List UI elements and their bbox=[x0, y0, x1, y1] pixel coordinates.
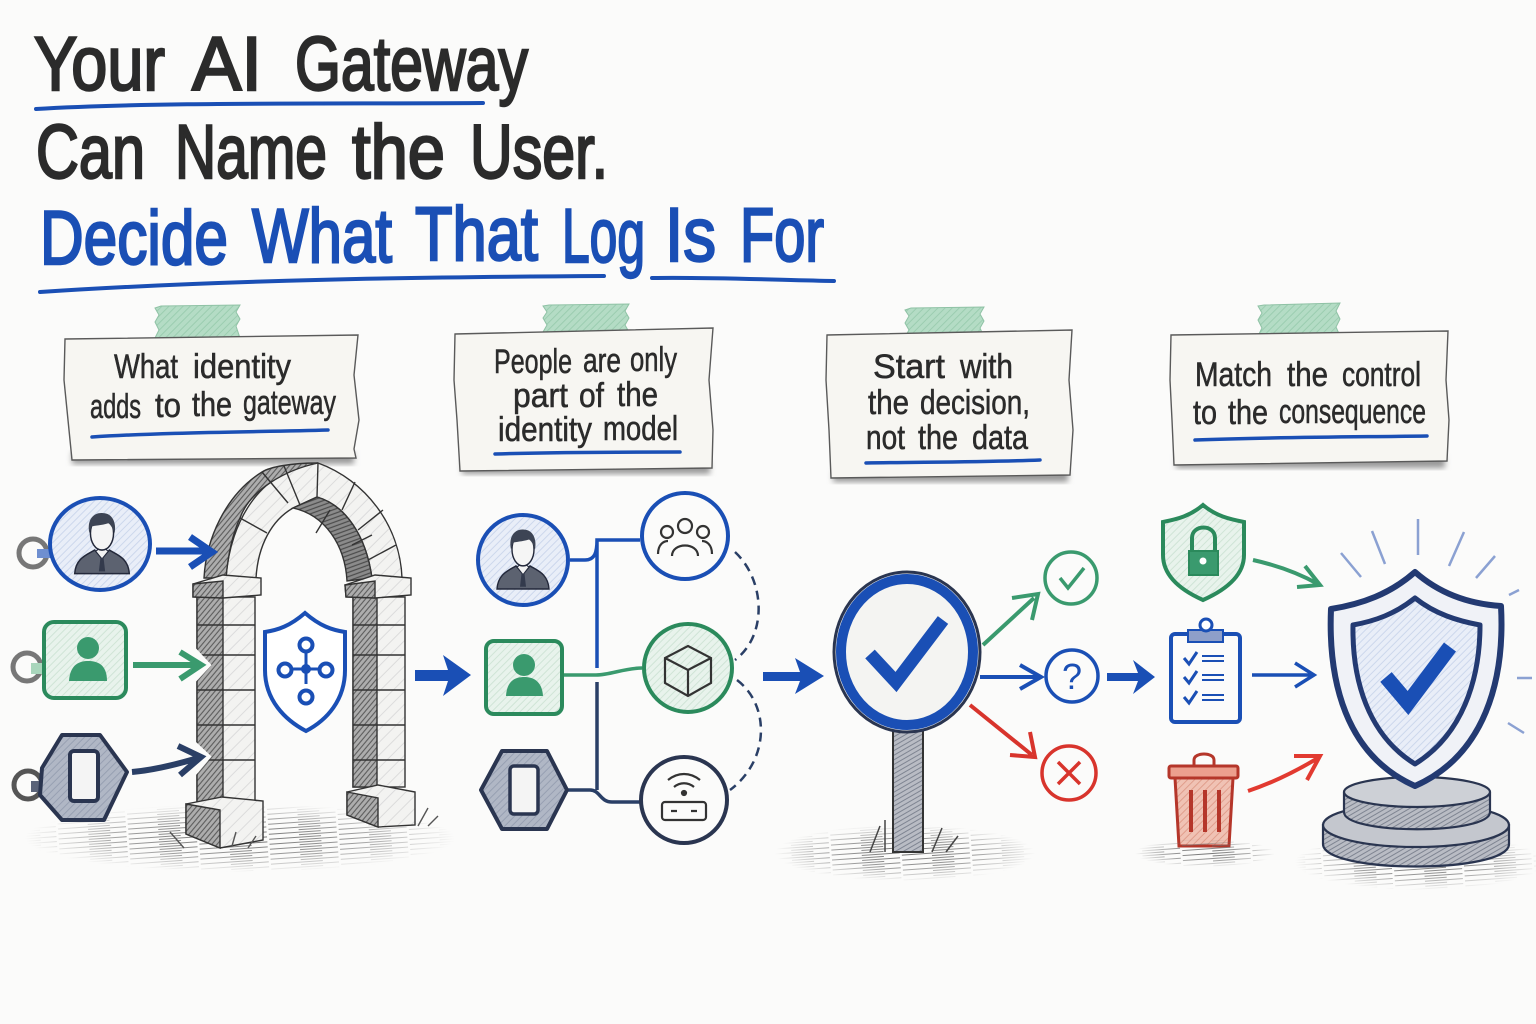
note card: start with the decision: decision, bbox=[920, 384, 1030, 422]
group node bbox=[642, 493, 728, 579]
note card: what identity adds: identity bbox=[193, 348, 291, 386]
title: Gateway bbox=[295, 22, 528, 107]
note card: match the control: to bbox=[1193, 394, 1217, 432]
title bbox=[34, 22, 834, 292]
title: Your bbox=[34, 22, 165, 107]
title: Can bbox=[36, 110, 145, 195]
title: That bbox=[415, 192, 538, 277]
note card: match the control: the bbox=[1228, 394, 1268, 432]
service identity tag bbox=[13, 622, 126, 698]
note card: start with the decision: with bbox=[959, 348, 1013, 386]
note card: match the control: Match bbox=[1195, 356, 1272, 394]
arrow: trash to shield bbox=[1248, 756, 1320, 791]
note card: start with the decision bbox=[826, 307, 1073, 482]
arrow: decision to question bbox=[980, 665, 1041, 689]
icon: question mark: ? bbox=[1062, 656, 1082, 697]
arrow: service tag to gateway bbox=[133, 650, 204, 680]
ground shading under arch bbox=[25, 804, 455, 872]
arrow: user tag to gateway bbox=[156, 537, 212, 567]
title: Name bbox=[175, 110, 327, 195]
ground shading under pedestal bbox=[1300, 845, 1536, 889]
arrow: gateway to identity model bbox=[415, 655, 471, 696]
note card: people are only part bbox=[454, 304, 713, 474]
title: For bbox=[740, 193, 824, 278]
note card: what identity adds: to bbox=[155, 387, 181, 425]
dashed links bbox=[730, 552, 761, 790]
icon: question mark bbox=[1046, 650, 1098, 702]
identity tree connectors bbox=[563, 540, 642, 802]
note card: people are only part: People bbox=[494, 343, 572, 381]
title: AI bbox=[192, 22, 262, 107]
note card: people are only part: are bbox=[583, 342, 621, 380]
note card: start with the decision: the bbox=[918, 419, 958, 457]
note card: start with the decision: the bbox=[868, 384, 909, 422]
icon: gateway shield with network bbox=[265, 613, 345, 731]
note card: people are only part: only bbox=[630, 341, 677, 379]
note card: people are only part: of bbox=[579, 377, 604, 415]
note card: match the control: consequence bbox=[1279, 393, 1426, 431]
note card: what identity adds: gateway bbox=[243, 384, 336, 422]
note card: what identity adds bbox=[64, 305, 359, 464]
title: What bbox=[252, 194, 392, 279]
note card: match the control: the bbox=[1287, 356, 1328, 394]
decision sign bbox=[834, 572, 980, 852]
arrow: clipboard to shield bbox=[1252, 663, 1314, 687]
stone archway bbox=[170, 463, 438, 848]
arrow: identity model to decision bbox=[763, 658, 824, 694]
note card: start with the decision: not bbox=[866, 419, 905, 457]
arrow: decision to controls bbox=[1107, 660, 1155, 694]
icon: reject cross bbox=[1042, 746, 1096, 800]
title: the bbox=[352, 110, 445, 195]
arrow: lock to shield bbox=[1253, 560, 1320, 587]
icon: audit clipboard bbox=[1171, 619, 1240, 722]
arrow: device tag to gateway bbox=[132, 742, 204, 776]
device router node bbox=[641, 757, 727, 843]
shield with check bbox=[1331, 572, 1501, 786]
arrow: decision to reject bbox=[970, 705, 1035, 757]
note card: what identity adds: adds bbox=[90, 388, 141, 426]
arrow: decision to keep bbox=[983, 594, 1038, 645]
user identity tag bbox=[19, 498, 150, 590]
note card: people are only part: part bbox=[513, 377, 569, 415]
note card: match the control: control bbox=[1342, 356, 1421, 394]
device node bbox=[481, 751, 567, 829]
title: Is bbox=[665, 193, 716, 278]
icon: green lock shield bbox=[1163, 505, 1244, 600]
note card: people are only part: the bbox=[617, 376, 658, 414]
note card: people are only part: identity bbox=[498, 411, 592, 449]
note card: people are only part: model bbox=[603, 410, 678, 448]
icon: approve check bbox=[1045, 552, 1097, 604]
service node bbox=[486, 641, 562, 714]
icon: red trash can bbox=[1169, 754, 1238, 846]
note card: what identity adds: the bbox=[192, 386, 232, 424]
device identity tag bbox=[14, 735, 127, 820]
title: Log bbox=[562, 194, 645, 279]
note card: start with the decision: Start bbox=[873, 348, 946, 386]
person node bbox=[478, 515, 568, 605]
title: User. bbox=[470, 110, 608, 195]
shield pedestal bbox=[1323, 777, 1509, 866]
ground shading under trash bbox=[1135, 839, 1275, 867]
ground shading under sign bbox=[775, 825, 1035, 881]
note card: start with the decision: data bbox=[972, 419, 1028, 457]
shield light rays bbox=[1341, 519, 1532, 733]
workload cube node bbox=[644, 624, 732, 712]
note card: what identity adds: What bbox=[114, 348, 178, 386]
note card: match the control bbox=[1170, 303, 1449, 468]
title: Decide bbox=[40, 196, 228, 281]
